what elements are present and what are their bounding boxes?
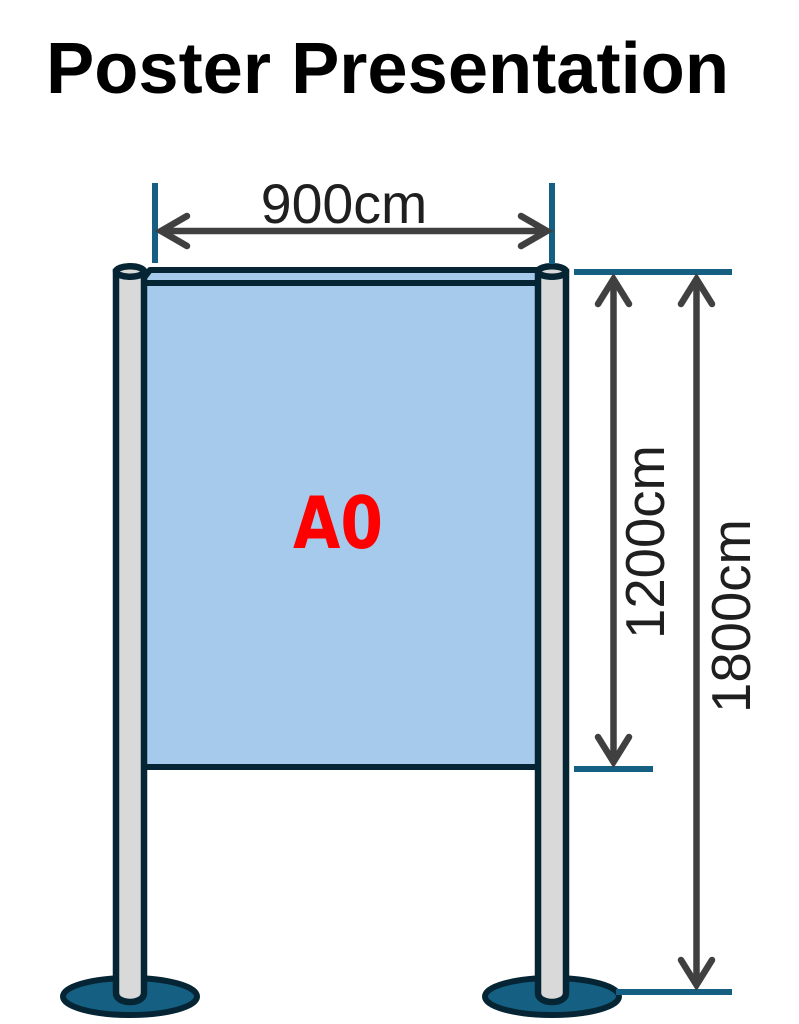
title: Poster Presentation [46,29,729,109]
arrow: total height 1800cm [681,279,712,985]
right post [538,266,566,1002]
poster height label: 1200cm [615,445,676,639]
width extension lines [155,183,552,264]
height extension lines [574,272,732,992]
right base [485,978,619,1015]
A0 label: A0 [293,481,383,565]
arrow: poster height 1200cm [598,279,629,762]
poster board: A0 [140,270,540,767]
left post [116,266,144,1002]
width label: 900cm [261,173,427,235]
left base [63,978,197,1015]
total height label: 1800cm [701,519,762,713]
arrow: width 900cm [161,216,547,246]
